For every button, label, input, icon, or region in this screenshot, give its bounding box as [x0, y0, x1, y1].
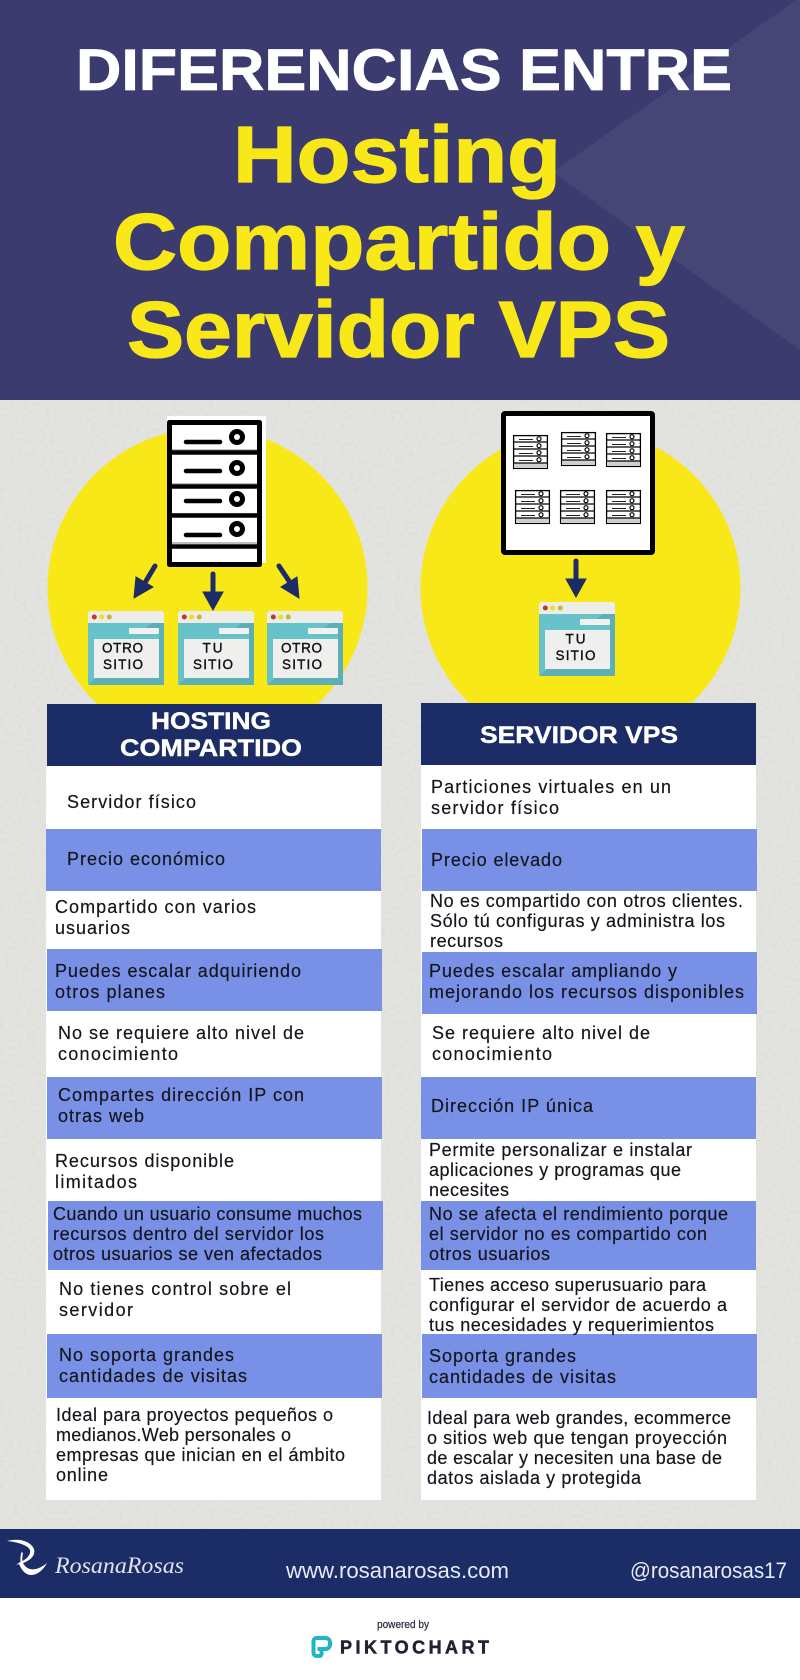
row: precio: Precio económico — [67, 849, 225, 869]
icon: window tu sitio — [178, 611, 254, 685]
row: ideal: empresas que inician en el ámbito — [56, 1445, 345, 1465]
row: conocimiento: Se requiere alto nivel de — [432, 1023, 650, 1043]
panel: hosting compartido table — [46, 704, 383, 1500]
row: ideal: de escalar y necesiten una base de — [427, 1448, 722, 1468]
row: visitas — [429, 1346, 616, 1387]
icon: piktochart logo — [314, 1638, 330, 1656]
arrow down — [566, 561, 586, 597]
icon: window otro sitio: SITIO — [103, 657, 143, 672]
row: conocimiento — [58, 1023, 304, 1064]
row: rendimiento: el servidor no es compartido con — [429, 1224, 707, 1244]
wordmark: PIKTOCHART — [340, 1638, 489, 1658]
row: rendimiento — [429, 1204, 728, 1264]
row: conocimiento — [432, 1023, 650, 1064]
piktochart credit — [314, 1619, 489, 1658]
footer bar — [0, 1529, 800, 1598]
row: particiones — [431, 777, 671, 818]
row: ideal: datos aislada y protegida — [427, 1468, 642, 1488]
row: superusuario: tus necesidades y requerimientos — [429, 1315, 714, 1335]
icon: server — [167, 416, 266, 564]
row: particiones: servidor físico — [431, 798, 559, 818]
icon: window otro sitio right — [267, 611, 343, 685]
row: visitas: No soporta grandes — [59, 1345, 234, 1365]
row: superusuario: Tienes acceso superusuario para — [429, 1275, 707, 1295]
row backgrounds — [46, 766, 383, 1500]
row: ideal: Ideal para proyectos pequeños o — [56, 1405, 333, 1425]
row: ideal — [56, 1405, 345, 1485]
arrow middle — [203, 574, 223, 610]
row: recursos — [55, 1151, 234, 1192]
panel: servidor vps table — [421, 703, 757, 1500]
row: ideal: online — [56, 1465, 108, 1485]
row: servidor: Servidor físico — [67, 792, 196, 812]
row: ideal: Ideal para web grandes, ecommerce — [427, 1408, 731, 1428]
row: visitas: cantidades de visitas — [59, 1366, 247, 1386]
icon: window tu sitio: SITIO — [556, 648, 596, 663]
row: control: No tienes control sobre el — [59, 1279, 291, 1299]
row: escalar: Puedes escalar adquiriendo — [55, 961, 301, 981]
row: escalar — [429, 961, 744, 1002]
yellow circle right — [420, 428, 740, 748]
row: escalar: otros planes — [55, 982, 165, 1002]
row: no compartido: No es compartido con otros clientes. — [430, 891, 743, 911]
row: rendimiento: Cuando un usuario consume muchos — [53, 1204, 362, 1224]
row: rendimiento: otros usuarios — [429, 1244, 550, 1264]
row: conocimiento: No se requiere alto nivel de — [58, 1023, 304, 1043]
row: precio: Precio elevado — [431, 850, 562, 870]
heading bar — [421, 703, 756, 765]
row: ip: Compartes dirección IP con — [58, 1085, 304, 1105]
row: superusuario: configurar el servidor de acuerdo a — [429, 1295, 728, 1315]
row: ip: otras web — [58, 1106, 144, 1126]
page background — [0, 400, 800, 1680]
row: visitas — [59, 1345, 247, 1386]
title: first line: DIFERENCIAS ENTRE — [76, 38, 732, 103]
icon: window otro sitio: OTRO — [102, 640, 143, 656]
row: personalizar: necesites — [429, 1180, 509, 1200]
row: superusuario — [429, 1275, 728, 1335]
row: personalizar: aplicaciones y programas que — [429, 1160, 681, 1180]
icon: window tu sitio: TU — [566, 632, 586, 646]
row: rendimiento: otros usuarios se ven afectados — [53, 1244, 322, 1264]
row: escalar: Puedes escalar ampliando y — [429, 961, 677, 981]
heading bar: HOSTING — [151, 708, 271, 735]
row: visitas: cantidades de visitas — [429, 1367, 616, 1387]
row: ideal — [427, 1408, 731, 1488]
row: no compartido — [430, 891, 743, 951]
panel: servidor vps illustration — [420, 414, 740, 748]
row: ip — [58, 1085, 304, 1126]
row: conocimiento: conocimiento — [432, 1044, 552, 1064]
row backgrounds — [421, 765, 757, 1500]
yellow circle left — [48, 428, 368, 748]
arrow right — [279, 566, 299, 598]
icon: window otro sitio right: SITIO — [282, 657, 322, 672]
row: compartido — [55, 897, 256, 938]
row: control: servidor — [59, 1300, 133, 1320]
social handle: @rosanarosas17 — [630, 1558, 787, 1583]
heading bar — [47, 704, 382, 766]
row: personalizar — [429, 1140, 692, 1200]
icon: window otro sitio — [88, 611, 164, 685]
row: no compartido: recursos — [430, 931, 503, 951]
header banner — [0, 0, 800, 400]
icon: window tu sitio: TU — [202, 640, 222, 656]
row: conocimiento: conocimiento — [58, 1044, 178, 1064]
heading bar: COMPARTIDO — [120, 735, 302, 762]
row: particiones: Particiones virtuales en un — [431, 777, 671, 797]
title: highlighted: Hosting — [233, 110, 561, 199]
row: rendimiento: recursos dentro del servidor los — [53, 1224, 324, 1244]
website: www.rosanarosas.com — [285, 1558, 509, 1583]
powered by: powered by — [377, 1619, 429, 1631]
row: compartido: usuarios — [55, 918, 130, 938]
title: highlighted: Compartido y — [113, 197, 686, 286]
row: escalar — [55, 961, 301, 1002]
logo: rosana rosas: RosanaRosas — [54, 1553, 184, 1578]
row: personalizar: Permite personalizar e instalar — [429, 1140, 692, 1160]
row: no compartido: Sólo tú configuras y administra los — [430, 911, 725, 931]
row: rendimiento: No se afecta el rendimiento porque — [429, 1204, 728, 1224]
title: highlighted: Servidor VPS — [127, 285, 670, 374]
row: ideal: o sitios web que tengan proyección — [427, 1428, 727, 1448]
heading bar: SERVIDOR VPS — [480, 722, 678, 749]
row: ideal: medianos.Web personales o — [56, 1425, 291, 1445]
row: ip: Dirección IP única — [431, 1096, 594, 1116]
icon: server cabinet — [504, 414, 652, 552]
row: recursos: Recursos disponible — [55, 1151, 234, 1171]
icon: window tu sitio — [539, 602, 615, 676]
row: recursos: limitados — [55, 1172, 137, 1192]
arrow left — [134, 566, 155, 598]
row: rendimiento — [53, 1204, 362, 1264]
row: visitas: Soporta grandes — [429, 1346, 576, 1366]
title: highlighted — [113, 110, 686, 374]
logo: rosana rosas — [7, 1540, 184, 1578]
panel: hosting compartido illustration — [48, 416, 368, 748]
icon: window tu sitio: SITIO — [193, 657, 233, 672]
row: escalar: mejorando los recursos disponibles — [429, 982, 744, 1002]
row: compartido: Compartido con varios — [55, 897, 256, 917]
icon: window otro sitio right: OTRO — [281, 640, 322, 656]
row: control — [59, 1279, 291, 1320]
